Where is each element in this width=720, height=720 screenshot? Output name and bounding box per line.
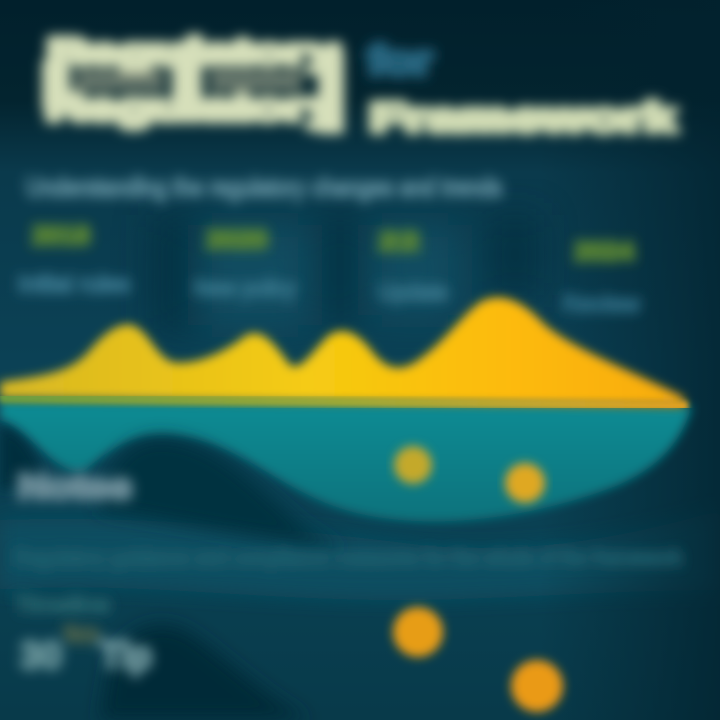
stat 1: 2018	[32, 220, 90, 250]
area chart: yellow peaks	[0, 297, 688, 406]
subtitle: Understanding the regulatory changes and trends	[26, 172, 502, 202]
dark wave: middle hump	[100, 438, 350, 550]
lower label: Notes	[18, 468, 132, 506]
footer values: to	[64, 618, 100, 648]
footer values	[20, 618, 152, 677]
footer small text: Timeline	[14, 592, 110, 617]
stat 2: 2020	[206, 224, 268, 254]
title: left block: Regulatory	[48, 31, 338, 72]
dark wave: left edge	[0, 425, 45, 490]
stat 1: Initial rules	[18, 271, 130, 298]
dark wave: bottom hump	[100, 625, 310, 720]
title: second word: Framework	[370, 96, 677, 140]
stat 4: 2024	[574, 236, 635, 266]
stat 3: Update	[378, 279, 448, 306]
title: connecting word: for	[368, 39, 432, 83]
footer values: 30	[20, 635, 62, 677]
stat 3: 22	[378, 226, 420, 256]
chart baseline	[0, 398, 688, 406]
stat 2	[194, 224, 296, 302]
stat 2: New policy	[194, 275, 296, 302]
footer values: Tip	[100, 635, 152, 677]
stat 4	[562, 236, 641, 318]
marker dot 2	[505, 463, 545, 503]
lower background wave	[0, 510, 720, 600]
footer label	[14, 592, 152, 677]
marker dot 4	[511, 660, 563, 712]
marker dot 3	[393, 607, 443, 657]
stat 3	[378, 226, 448, 306]
title: left block	[42, 31, 344, 134]
teal wave band	[0, 400, 692, 522]
stat 4: Review	[562, 291, 641, 318]
stat columns	[18, 220, 641, 318]
title: left block: Regulatory	[46, 87, 338, 129]
stat 1	[18, 220, 130, 298]
title	[42, 31, 677, 140]
marker dot 1	[394, 446, 432, 484]
